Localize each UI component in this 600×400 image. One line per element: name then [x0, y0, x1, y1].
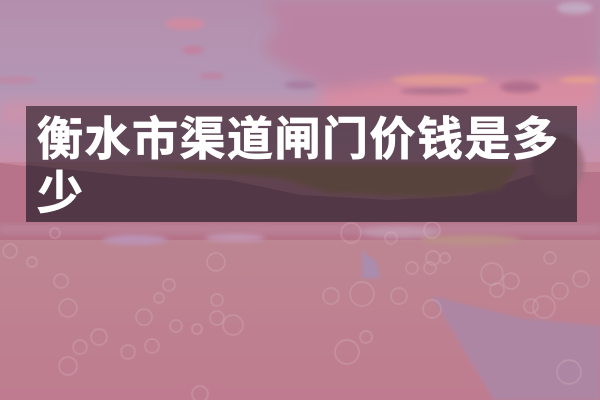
lit village band [0, 224, 600, 245]
path and stream [362, 250, 380, 278]
title: 衡水市渠道闸门价钱是多少 [37, 113, 560, 219]
horizon glow [130, 165, 520, 197]
distant hills [0, 163, 600, 240]
hills inside the banner, darker [26, 165, 577, 222]
bubbles [3, 222, 589, 400]
title banner [26, 106, 577, 222]
tree [532, 133, 584, 197]
